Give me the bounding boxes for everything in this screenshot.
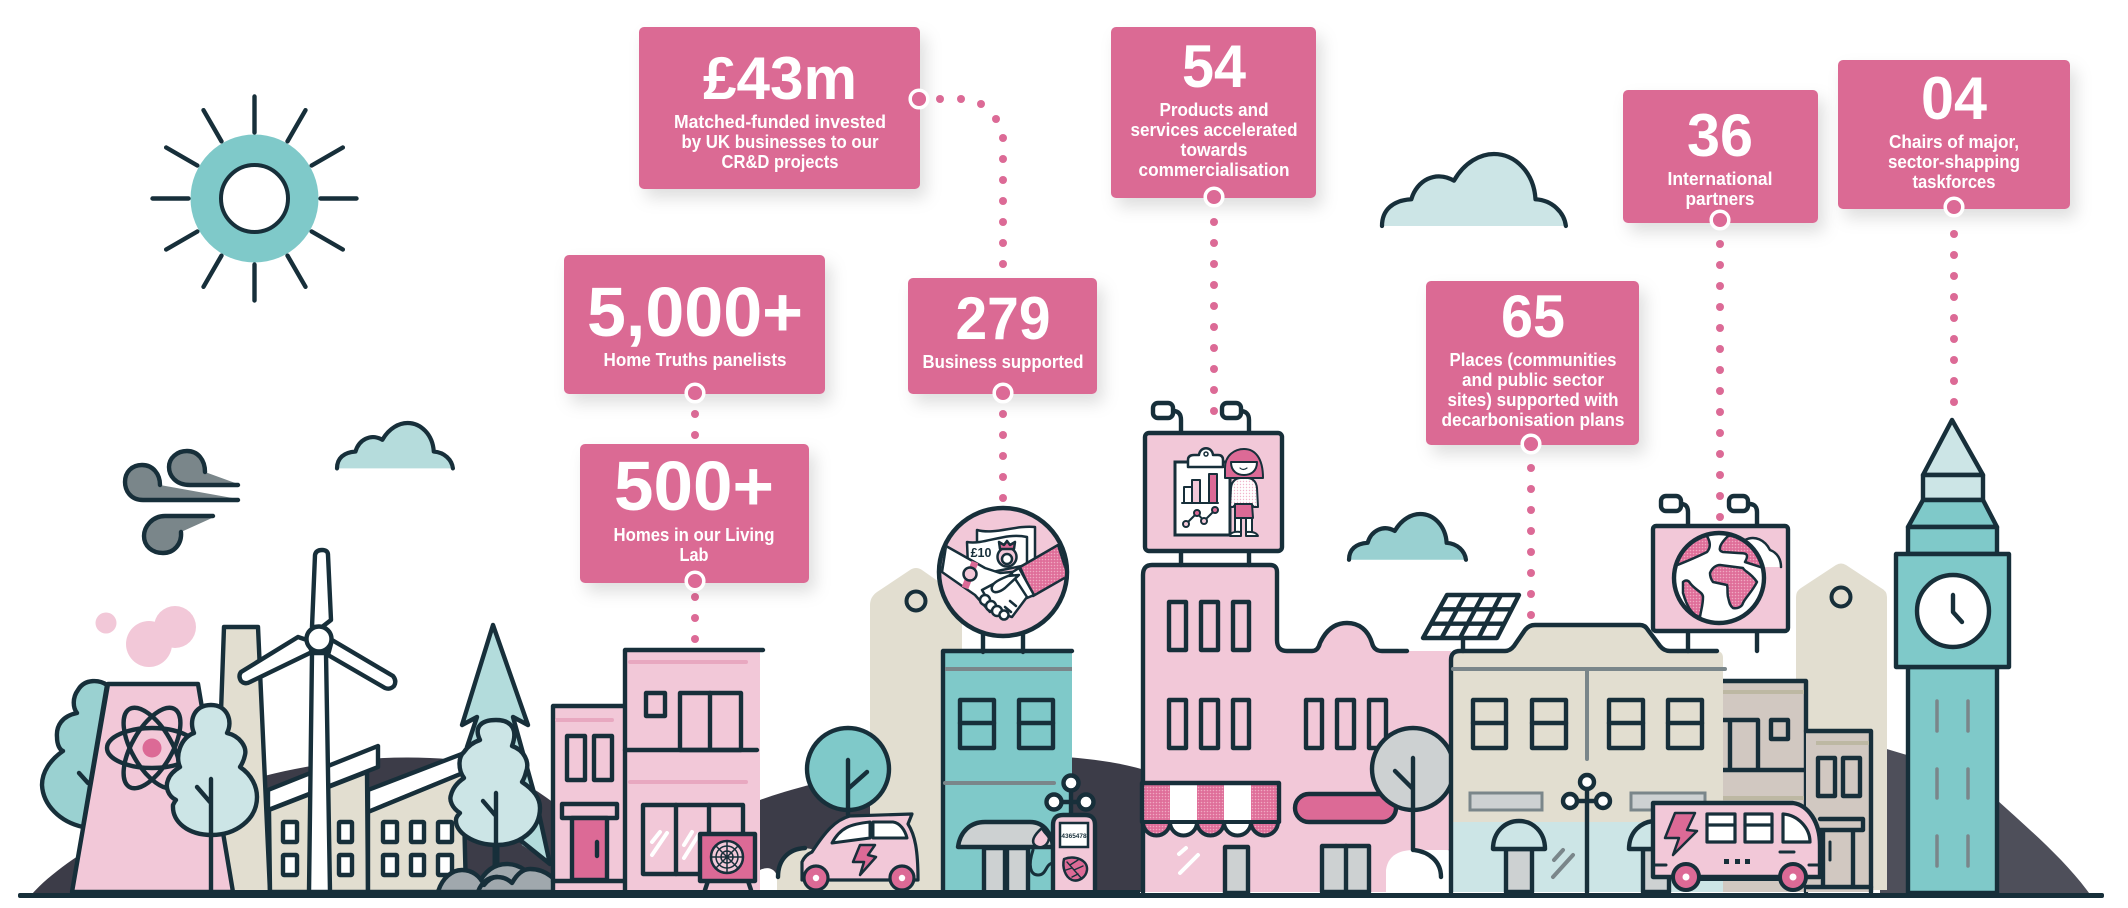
callout: 54 xyxy=(1111,27,1316,206)
pink smoke xyxy=(96,606,196,667)
callout: 04: sector-shapping xyxy=(1888,152,2020,172)
building: tall pink with heat pump xyxy=(625,650,763,892)
background tag building left xyxy=(870,568,962,892)
bushes xyxy=(438,864,562,892)
cloud: left small xyxy=(337,423,453,468)
icon: van bolt xyxy=(1665,813,1697,855)
spruce tree xyxy=(462,625,550,864)
callout: 500+ xyxy=(580,444,809,590)
teal round tree xyxy=(807,728,889,815)
callout: 54: services accelerated xyxy=(1130,120,1298,140)
callout: 500+: Homes in our Living xyxy=(614,525,774,545)
callout: 65: and public sector xyxy=(1462,370,1604,390)
callout: £43m: CR&D projects xyxy=(722,152,838,172)
callout: 5,000+: 5,000+ xyxy=(587,273,803,351)
cloud: top centre xyxy=(1382,154,1566,226)
person xyxy=(1225,449,1263,536)
callout: 500+: Lab xyxy=(680,545,708,565)
cloud: mid xyxy=(1349,514,1466,560)
icon: clock xyxy=(1917,575,1989,647)
callout: 54: towards xyxy=(1180,140,1248,160)
connector: 5,000+ to 500+ xyxy=(691,410,699,439)
icon: wind xyxy=(125,451,238,553)
wind turbine xyxy=(240,550,395,892)
factory windows xyxy=(283,822,452,875)
callout: 54: Products and xyxy=(1160,100,1268,120)
callout: 279 xyxy=(908,278,1097,402)
connector: 65 to building xyxy=(1527,464,1535,619)
background tag building right xyxy=(1796,564,1887,890)
door canopies xyxy=(1493,821,1682,892)
connector: 54 to billboard xyxy=(1210,218,1218,415)
hands xyxy=(980,574,1027,620)
callout: 5,000+: Home Truths panelists xyxy=(604,350,786,370)
callout: 36 xyxy=(1623,90,1818,229)
callout: 36: 36 xyxy=(1687,102,1753,169)
chimney stack xyxy=(212,626,270,892)
billboard: globe xyxy=(1653,496,1788,651)
grey round tree with bush xyxy=(1372,728,1478,892)
callout: 36: partners xyxy=(1686,189,1754,209)
bush beside car xyxy=(760,848,925,892)
van wheels xyxy=(1673,864,1806,890)
pink building windows xyxy=(1169,602,1386,748)
nuclear cooling tower xyxy=(72,684,233,892)
billboard: products chart xyxy=(1145,403,1282,565)
building: small pink xyxy=(553,706,625,892)
connector: 500+ to building xyxy=(691,593,699,643)
pink sign pill xyxy=(1295,794,1396,822)
van windows xyxy=(1707,814,1810,842)
icon: bolt xyxy=(853,845,876,875)
bank notes: £10 xyxy=(971,546,991,560)
callout: £43m xyxy=(639,27,928,189)
connector: 36 to globe xyxy=(1716,240,1724,521)
callout: 04: 04 xyxy=(1921,65,1988,132)
awning xyxy=(1142,783,1279,836)
callout: 36: International xyxy=(1668,169,1772,189)
icon: atom xyxy=(107,699,197,797)
clipboard xyxy=(1175,448,1230,535)
beige building windows xyxy=(1473,700,1702,748)
callout: £43m: Matched-funded invested xyxy=(674,112,886,132)
callout: 04: Chairs of major, xyxy=(1889,132,2019,152)
street lamp xyxy=(1563,775,1610,892)
EV charger: 4365478 xyxy=(1061,833,1087,840)
icon: leaf xyxy=(1063,858,1087,881)
building: taupe left xyxy=(1723,681,1806,892)
connector: £43m to 279 xyxy=(936,95,1007,268)
icon: heat pump xyxy=(700,834,755,890)
ground line xyxy=(18,890,2104,898)
callout: 500+: 500+ xyxy=(614,447,774,525)
car wheels xyxy=(804,866,914,890)
door canopy xyxy=(958,822,1053,893)
solar panel xyxy=(1423,595,1519,651)
icon: globe xyxy=(1672,530,1770,623)
tree behind cooling tower xyxy=(42,681,107,827)
electric car xyxy=(802,814,918,890)
icon: sun xyxy=(152,96,356,300)
callout: £43m: by UK businesses to our xyxy=(682,132,878,152)
callout: 65: decarbonisation plans xyxy=(1442,410,1624,430)
callout: 04 xyxy=(1838,60,2070,216)
tree front of factory xyxy=(450,720,540,892)
background hills xyxy=(32,747,2089,894)
callout: 65: Places (communities xyxy=(1450,350,1616,370)
connector: 04 to tower xyxy=(1950,230,1958,406)
callout: £43m: £43m xyxy=(703,45,857,112)
callout: 54: 54 xyxy=(1182,33,1247,100)
building: beige main xyxy=(1451,625,1725,892)
callout: 65: 65 xyxy=(1501,283,1565,350)
callout: 5,000+ xyxy=(564,255,825,402)
callout: 279: 279 xyxy=(956,285,1050,352)
watch xyxy=(964,562,976,588)
handshake sign xyxy=(939,508,1068,652)
connector: 279 to sign xyxy=(999,410,1007,502)
factory xyxy=(268,746,480,892)
globe cloud xyxy=(1745,538,1781,567)
clock tower xyxy=(1896,420,2009,893)
callout: 04: taskforces xyxy=(1912,172,1996,192)
building: main pink xyxy=(1142,565,1451,893)
electric van xyxy=(1653,803,1820,890)
callout: 65 xyxy=(1426,281,1639,453)
callout: 279: Business supported xyxy=(922,352,1084,372)
EV charger xyxy=(1030,776,1095,893)
callout: 65: sites) supported with xyxy=(1448,390,1618,410)
tree front of tower xyxy=(167,705,257,892)
callout: 54: commercialisation xyxy=(1138,160,1290,180)
building: teal xyxy=(943,651,1072,893)
building: taupe right xyxy=(1806,731,1871,892)
